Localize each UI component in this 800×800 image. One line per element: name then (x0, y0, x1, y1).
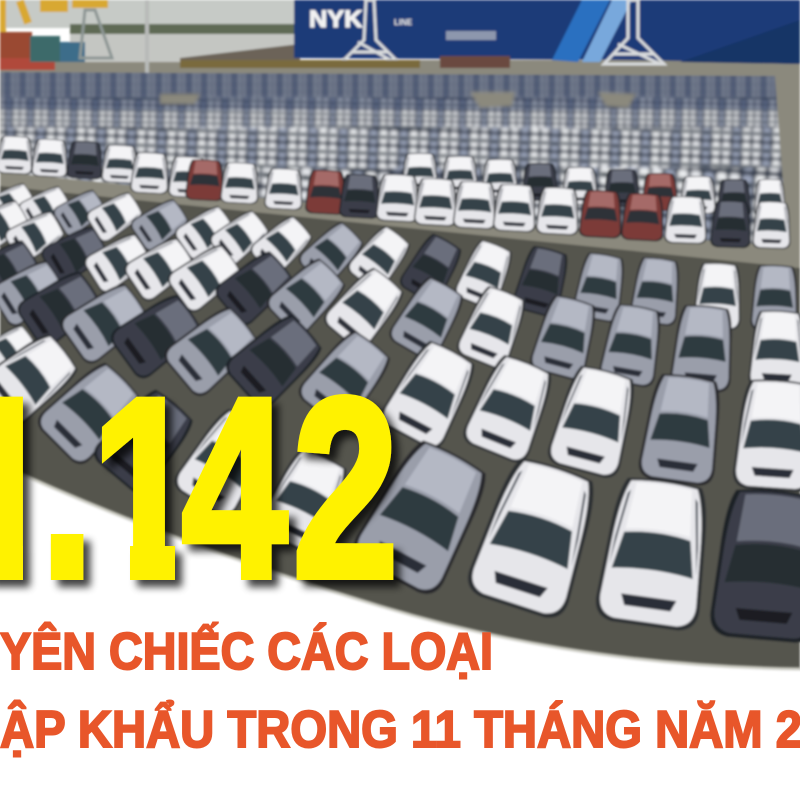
far row of parked cars (0, 135, 792, 249)
crane legs (80, 10, 112, 58)
white lower background (0, 462, 800, 800)
digit two: 2 (293, 345, 398, 631)
sky (0, 0, 300, 28)
ramp tower right (604, 0, 664, 64)
subtitle line one: YÊN CHIẾC CÁC LOẠI (0, 622, 493, 681)
quay shore strip (180, 44, 300, 66)
ship hull (294, 0, 800, 64)
ship name plate (446, 31, 496, 40)
ramp tower left (342, 0, 398, 62)
digit four: 4 (182, 345, 287, 631)
ship light stripe (582, 0, 632, 62)
foreground asphalt (0, 186, 800, 680)
far car block (0, 70, 800, 250)
ship logo: NYK (309, 6, 363, 33)
digit one: 1 (92, 345, 197, 631)
yellow cranes (0, 0, 108, 32)
ship blue stripe (552, 0, 610, 62)
ground pavement (0, 60, 800, 680)
tree line (70, 24, 295, 34)
light pole (145, 0, 149, 105)
headline number (0, 394, 406, 594)
gaps in block (470, 92, 515, 108)
ship right dark hull (680, 20, 800, 64)
quay equipment (180, 56, 510, 68)
container stack (0, 32, 85, 70)
ship logo line: LINE (394, 18, 413, 27)
near rows of parked cars (0, 179, 800, 644)
blue tint on distant rows (0, 70, 800, 110)
river water (70, 34, 300, 62)
decimal point: . (41, 345, 93, 631)
